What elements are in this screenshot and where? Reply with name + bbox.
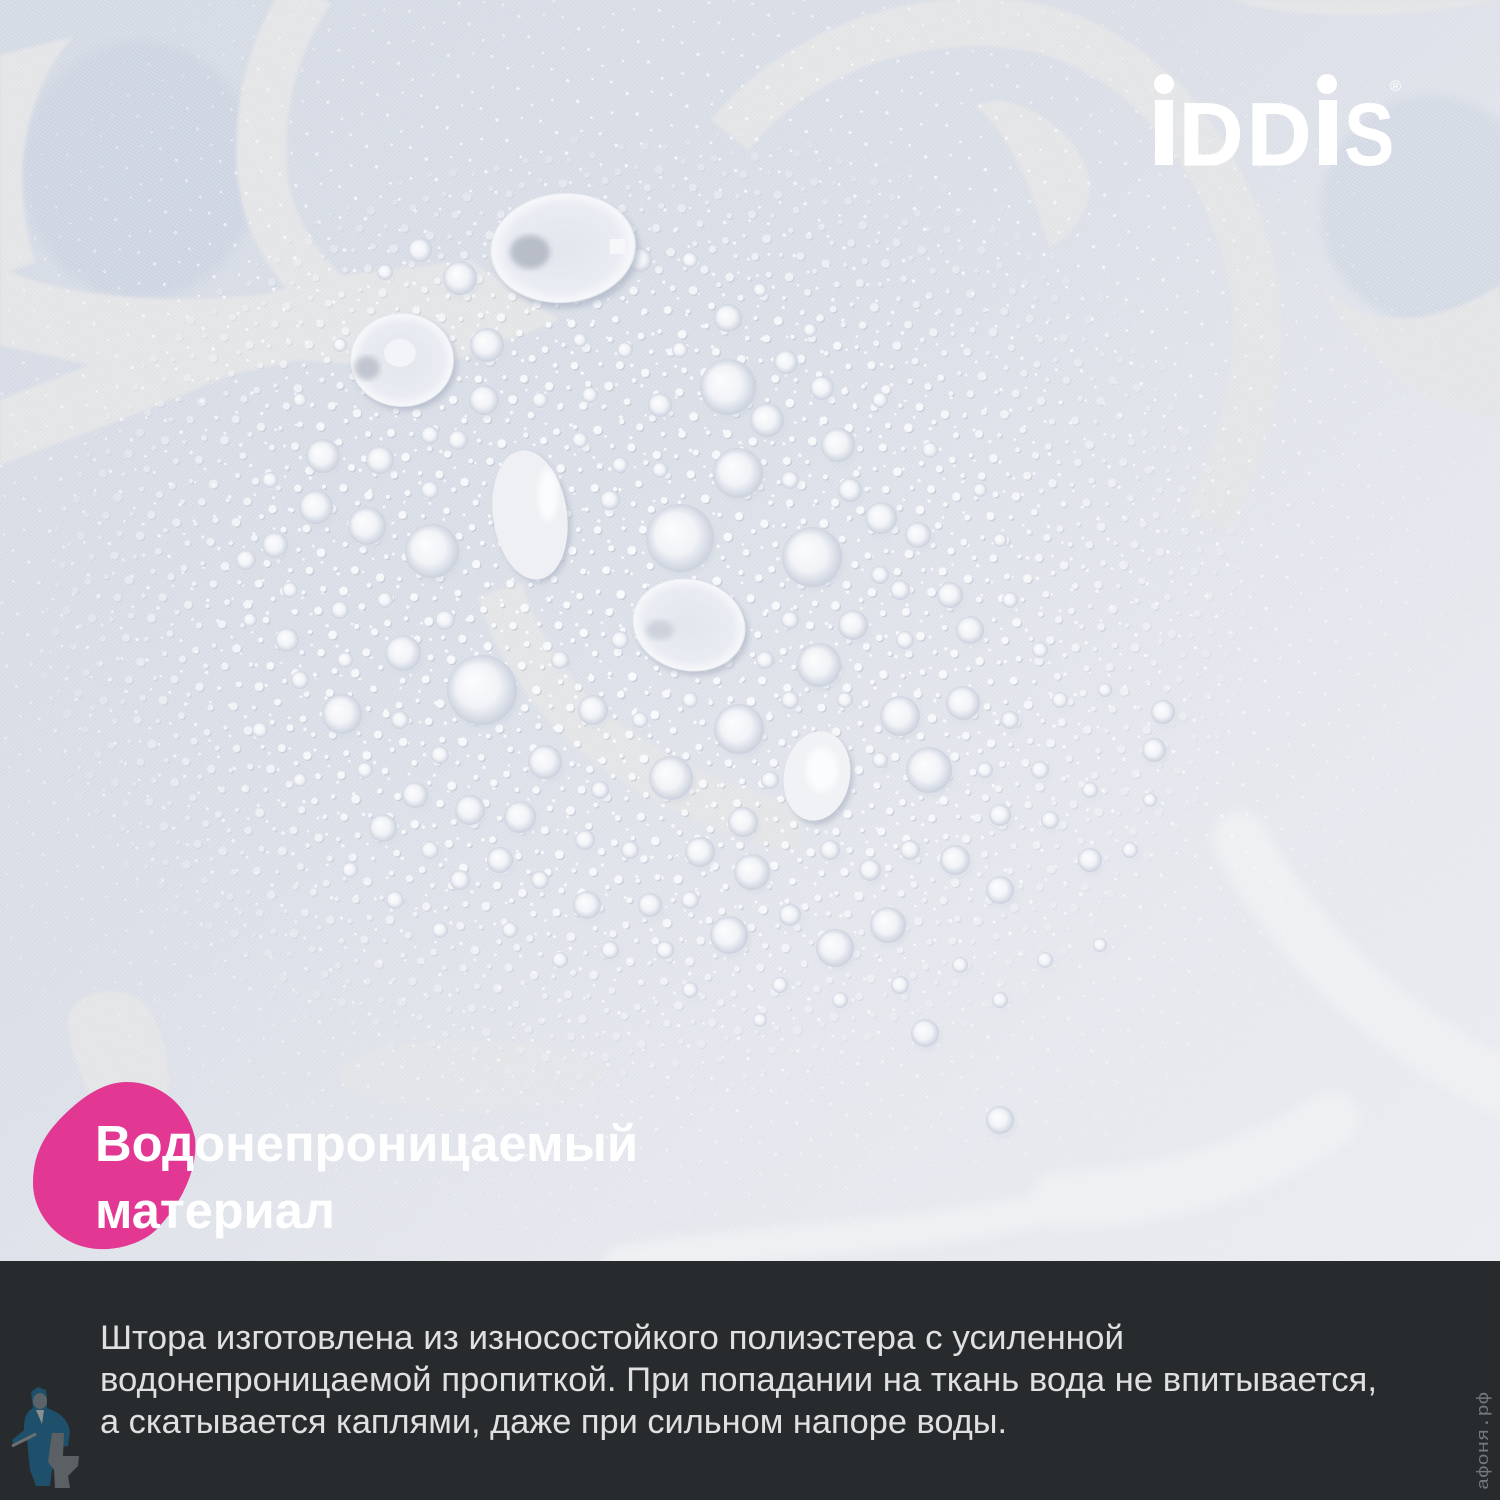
large droplet 2 (350, 313, 457, 411)
icon: plumber with toilet (12, 1387, 79, 1488)
large water droplets (350, 187, 860, 830)
heading (95, 1115, 638, 1239)
large droplet 1 (485, 187, 645, 314)
logo: iDDiS: ® (1390, 78, 1401, 95)
dark description panel (0, 1261, 1500, 1500)
heading: материал (95, 1182, 335, 1239)
description text (100, 1319, 1377, 1441)
logo: iDDiS: DD (1179, 84, 1311, 184)
medium water droplets (236, 238, 1175, 1134)
large droplet 3 (484, 445, 579, 588)
pink blob behind heading (33, 1082, 195, 1249)
large droplet 4 (624, 568, 757, 686)
logo: iDDiS: S (1344, 84, 1394, 184)
logo: iDDiS: I (1315, 84, 1340, 184)
watermark: афоня.рф (1475, 1392, 1494, 1490)
heading: Водонепроницаемый (95, 1115, 638, 1172)
small water droplets (0, 0, 1384, 1182)
description text: водонепроницаемой пропиткой. При попадании на ткань вода не впитывается, (100, 1361, 1377, 1399)
medium water droplets shadow (238, 241, 1177, 1137)
description text: а скатывается каплями, даже при сильном напоре воды. (100, 1403, 1007, 1441)
logo: iDDiS: I (1151, 84, 1176, 184)
logo: iDDiS (1151, 74, 1401, 184)
description text: Штора изготовлена из износостойкого полиэстера с усиленной (100, 1319, 1124, 1357)
large droplet 5 (777, 726, 860, 830)
